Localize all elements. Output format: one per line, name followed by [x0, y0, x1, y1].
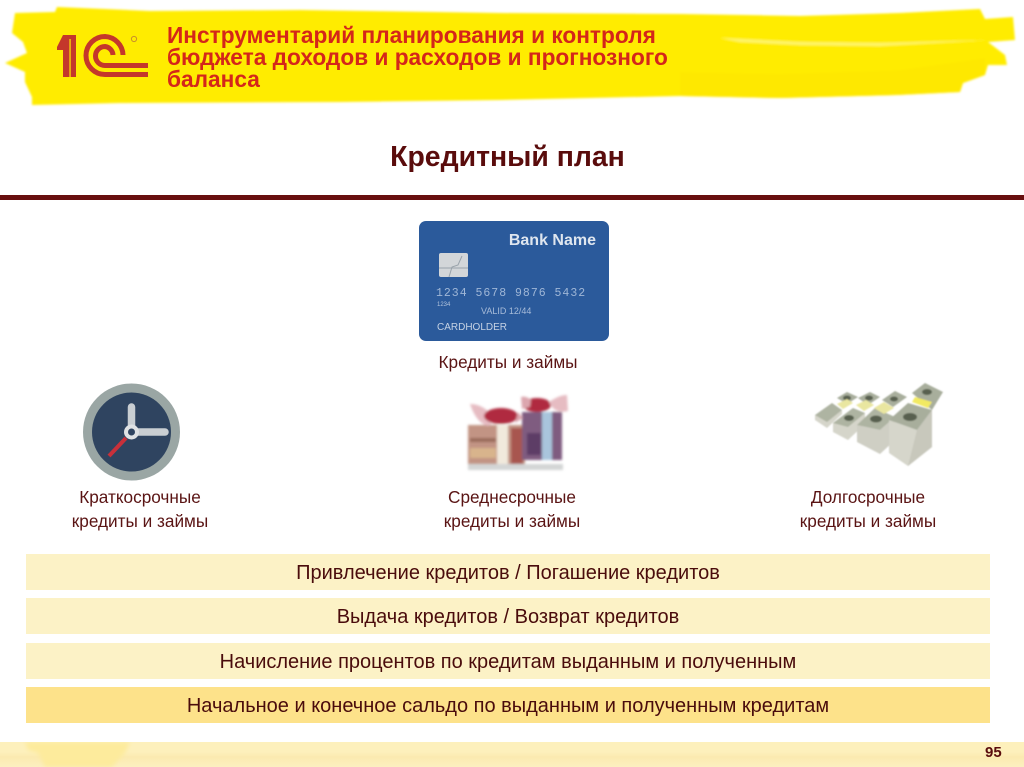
logo: 1C	[57, 34, 148, 77]
label: loans: Кредиты и займы	[439, 352, 577, 372]
header brush stroke	[4, 5, 1017, 107]
row: accrual of interest	[26, 643, 990, 679]
icon: stacks of dollars	[814, 382, 944, 466]
footer brush splash	[25, 742, 130, 767]
icon: clock	[83, 384, 180, 480]
label: short-term: кредиты и займы	[72, 511, 208, 531]
label: medium-term: Среднесрочные	[448, 487, 576, 507]
label: short-term	[72, 487, 208, 531]
label: medium-term: кредиты и займы	[444, 511, 580, 531]
title: Инструментарий планирования и контроля	[167, 22, 656, 48]
label: long-term: кредиты и займы	[800, 511, 936, 531]
label: long-term	[800, 487, 936, 531]
label: medium-term	[444, 487, 580, 531]
label: short-term: Краткосрочные	[79, 487, 201, 507]
icon: credit card: 1234	[437, 302, 451, 308]
row: raising and repaying: Привлечение кредитов / Погашение кредитов	[296, 562, 720, 584]
page number: 95	[985, 744, 1002, 761]
title	[167, 22, 668, 92]
icon: credit card: VALID 12/44	[481, 306, 531, 316]
row: issuing and returning	[26, 598, 990, 634]
divider	[0, 195, 1024, 200]
icon: credit card: 1234 5678 9876 5432	[436, 287, 586, 300]
footer band	[0, 742, 1024, 767]
row: opening and closing balance: Начальное и конечное сальдо по выданным и полученным кредитам	[187, 695, 829, 717]
row: opening and closing balance	[26, 687, 990, 723]
icon: credit card: Bank Name	[509, 232, 596, 249]
row: issuing and returning: Выдача кредитов / Возврат кредитов	[337, 606, 679, 628]
heading: Кредитный план	[390, 141, 625, 173]
icon: gift-wrapped banknotes	[466, 394, 570, 471]
icon: credit card	[419, 221, 609, 341]
label: long-term: Долгосрочные	[811, 487, 925, 507]
title: бюджета доходов и расходов и прогнозного	[167, 44, 668, 70]
row: raising and repaying	[26, 554, 990, 590]
title: баланса	[167, 66, 260, 92]
row: accrual of interest: Начисление процентов по кредитам выданным и полученным	[220, 651, 796, 673]
icon: credit card: CARDHOLDER	[437, 322, 507, 333]
